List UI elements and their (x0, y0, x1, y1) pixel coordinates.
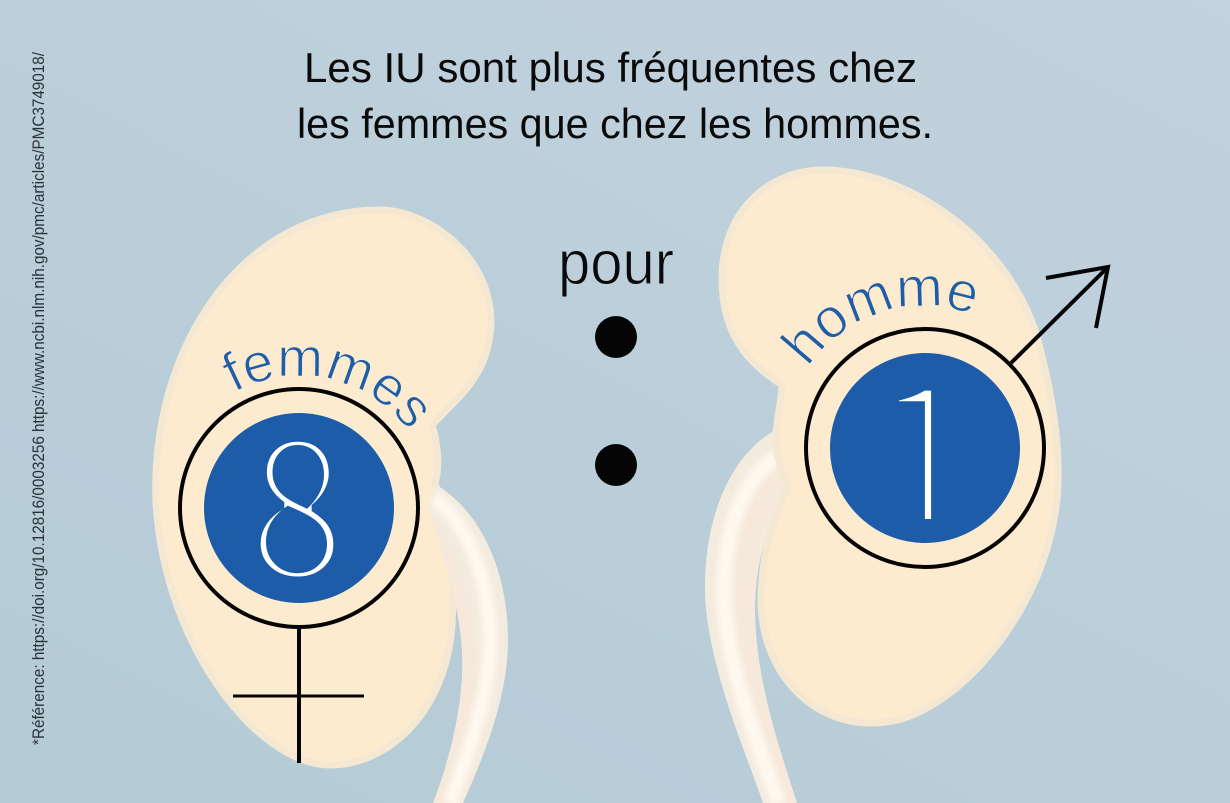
number 8: 8 (248, 352, 346, 636)
female symbol with number 8 (178, 347, 426, 763)
left kidney (156, 210, 491, 765)
ratio colon (595, 316, 637, 486)
left ureter (428, 484, 508, 803)
femmes label: femmes (222, 347, 426, 426)
title: Les IU sont plus fréquentes chez (304, 44, 917, 91)
right kidney (722, 170, 1058, 723)
blue disc (830, 353, 1020, 543)
title (297, 44, 933, 147)
homme label: homme (780, 276, 975, 364)
pour label: pour (558, 229, 674, 298)
number 1: 1 (868, 291, 980, 595)
ring and cross (180, 389, 418, 763)
male symbol with number 1 (780, 264, 1110, 569)
title: les femmes que chez les hommes. (297, 100, 933, 147)
blue disc (204, 413, 394, 603)
ring and arrow (806, 267, 1108, 567)
right ureter (700, 425, 800, 803)
